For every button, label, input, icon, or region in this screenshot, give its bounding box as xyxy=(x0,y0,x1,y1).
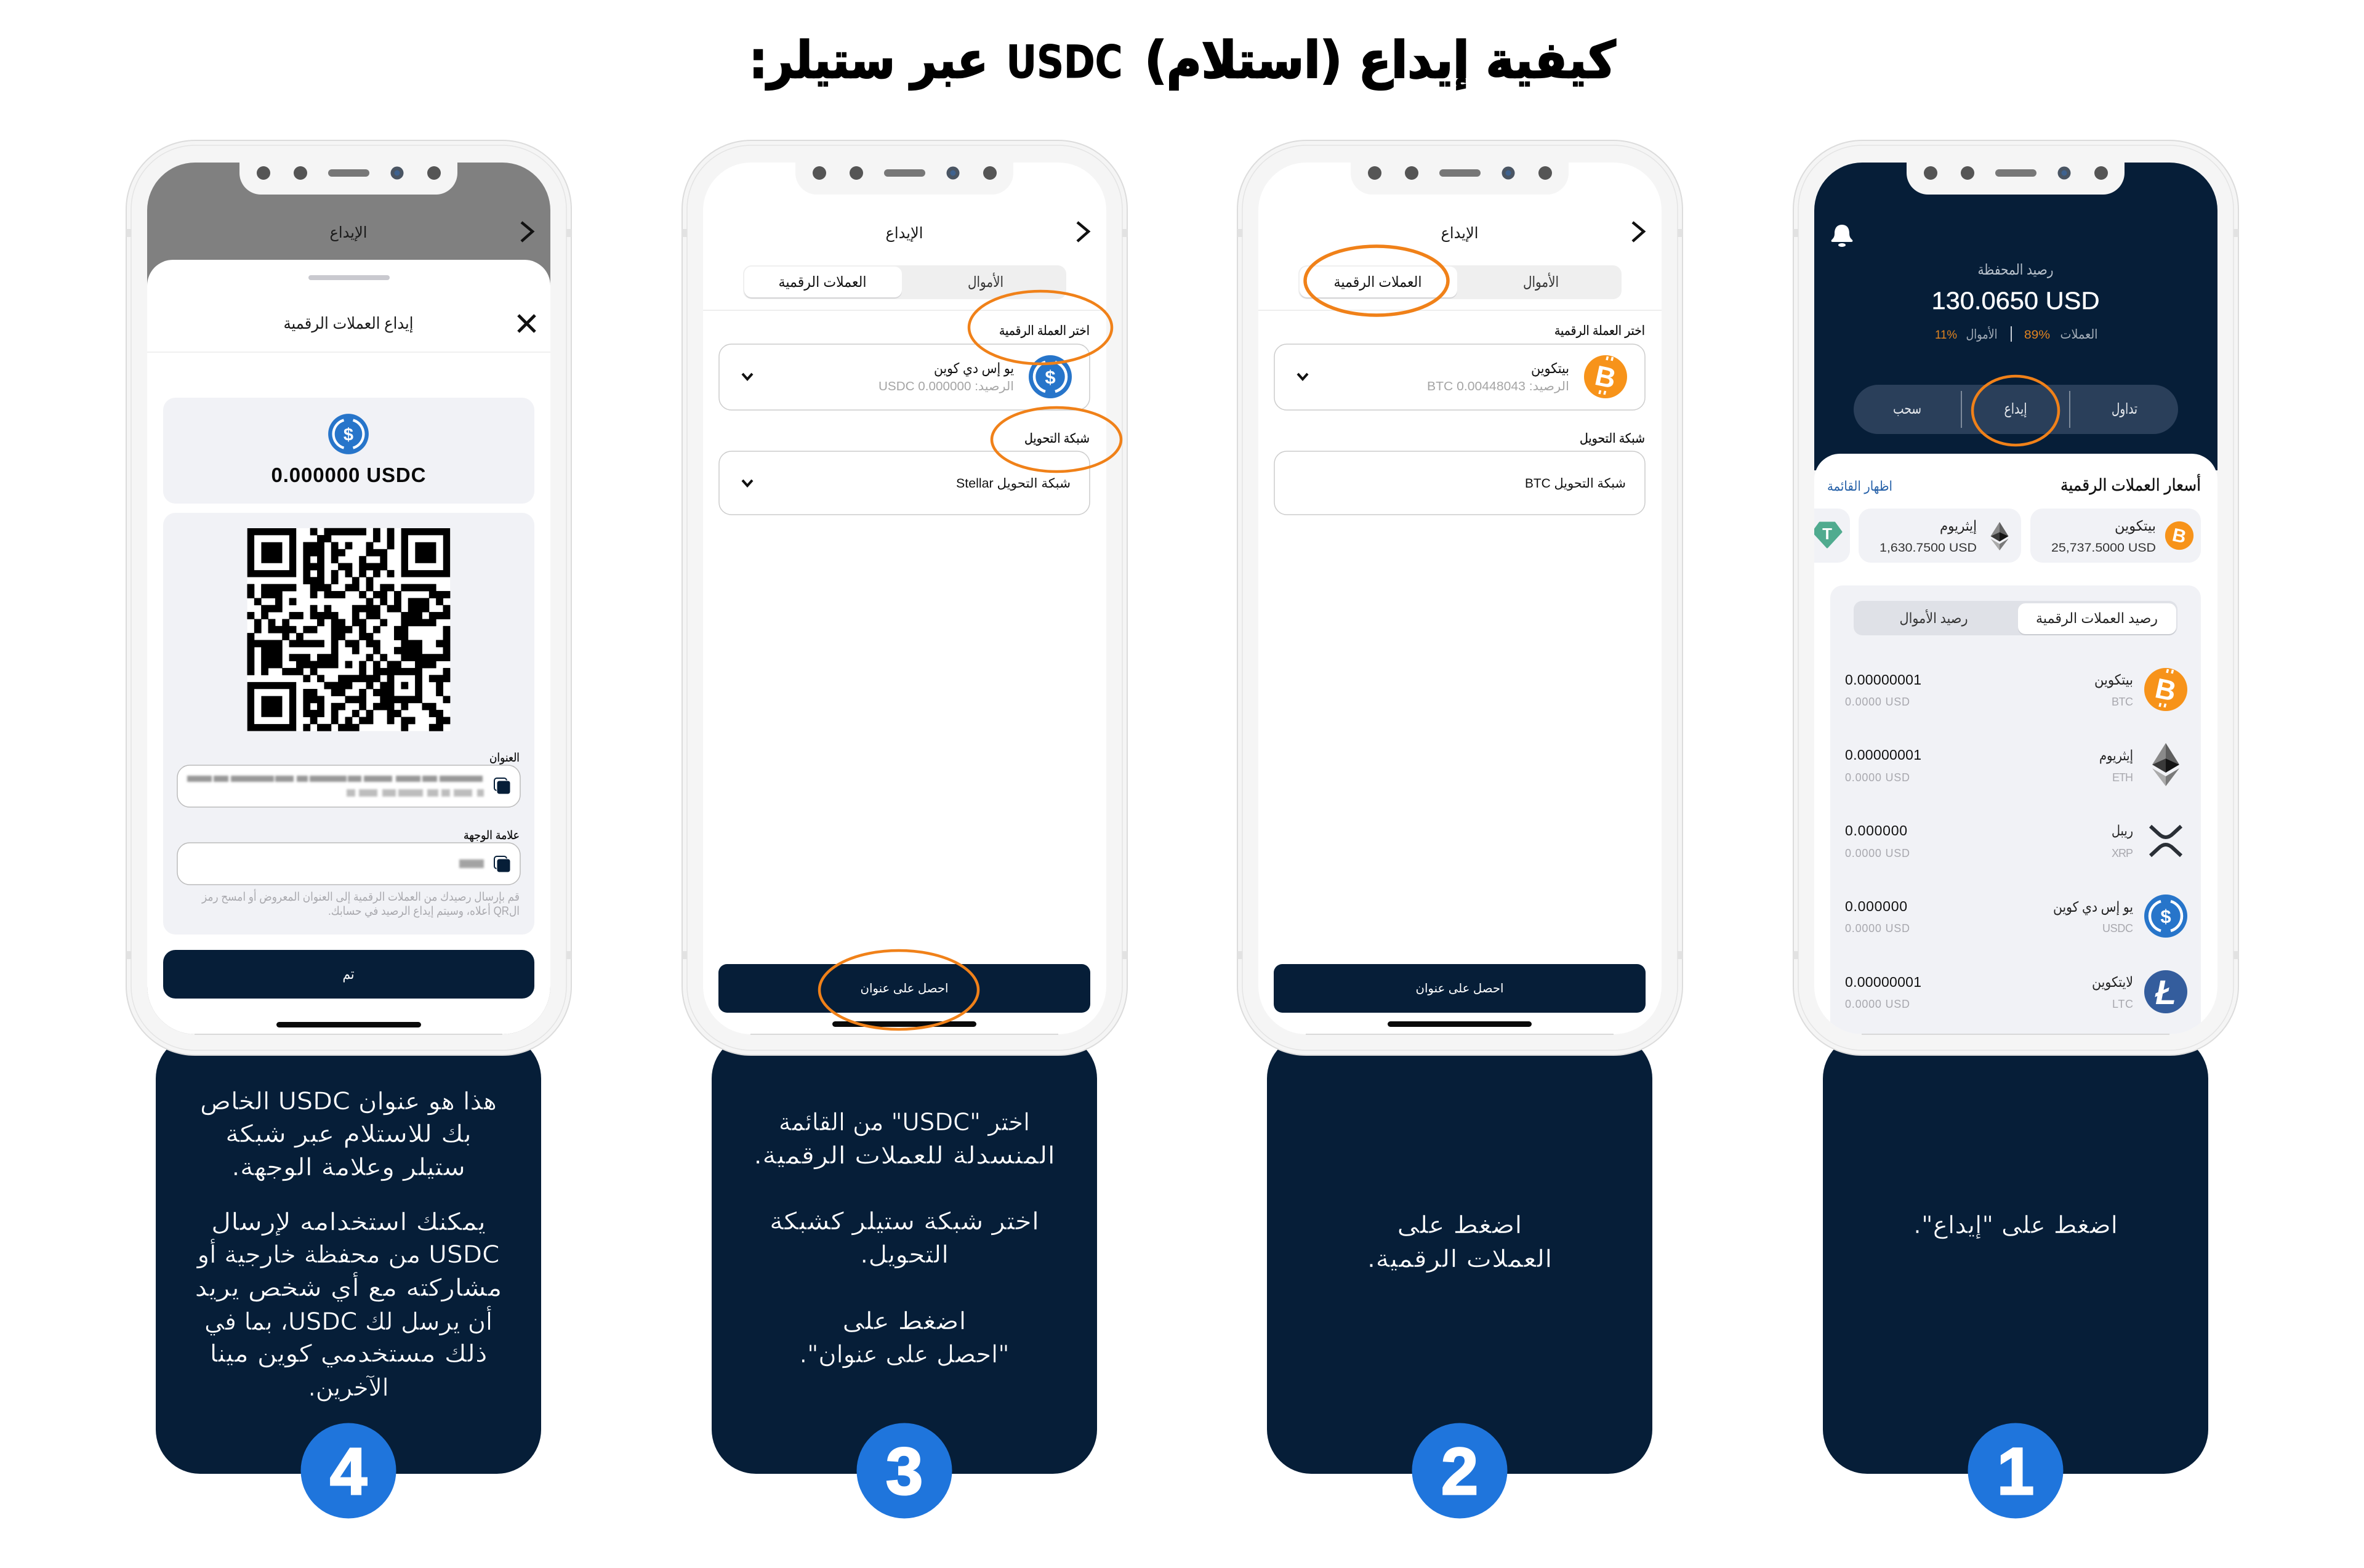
text: step 4 first paragraph xyxy=(200,1088,497,1181)
step number 4: 4 xyxy=(330,1434,367,1508)
highlight: get address button xyxy=(819,951,978,1029)
price card: Ethereum xyxy=(1859,509,2021,563)
title xyxy=(749,31,1616,90)
balance tabs: رصيد الأموال xyxy=(1900,609,1968,627)
QR code xyxy=(247,528,450,731)
text: press get address: "احصل على عنوان". xyxy=(799,1341,1010,1369)
field: currency xyxy=(1274,324,1645,410)
field: network xyxy=(1274,432,1645,515)
step 3 column xyxy=(682,140,1127,1518)
row: Litecoin: LTC xyxy=(2112,998,2133,1010)
row: USDC: 0.0000 USD xyxy=(1845,922,1910,935)
heading: crypto prices: أسعار العملات الرقمية xyxy=(2060,473,2201,495)
field: network xyxy=(719,432,1090,515)
action pill: إيداع xyxy=(2004,401,2027,418)
text: step 4 second paragraph: أن يرسل لك USDC، بما في xyxy=(204,1306,492,1336)
row: XRP: XRP xyxy=(2112,847,2133,859)
step 2 column xyxy=(1237,140,1683,1518)
destination tag field xyxy=(177,829,520,885)
button: get address xyxy=(718,964,1090,1013)
row: Ethereum: ETH xyxy=(2112,771,2133,784)
text: step 4 first paragraph: بك للاستلام عبر شبكة xyxy=(225,1120,472,1148)
panel: step 4 instructions xyxy=(156,1034,541,1474)
text: step 4 second paragraph: USDC من محفظة خارجية أو xyxy=(196,1239,500,1269)
text: press get address xyxy=(799,1308,1010,1369)
title: كيفية إيداع (استلام) xyxy=(1145,31,1616,90)
price card: Ethereum: إيثريوم xyxy=(1940,518,1977,534)
icon: copy address xyxy=(494,778,510,794)
icon: copy tag xyxy=(494,856,510,872)
icon: USDC xyxy=(328,414,369,454)
icon: close xyxy=(518,315,535,332)
row: Bitcoin: بيتكوين xyxy=(2094,672,2133,688)
tabs: الأموال xyxy=(968,273,1003,291)
text: press crypto tab xyxy=(1367,1212,1553,1273)
row: Bitcoin: 0.00000001 xyxy=(1845,672,1921,688)
highlight: deposit button xyxy=(1972,376,2059,445)
notch xyxy=(1907,163,2125,195)
row: Bitcoin: 0.0000 USD xyxy=(1845,696,1910,708)
icon: back chevron xyxy=(521,222,533,241)
icon: USDC xyxy=(1029,355,1072,398)
screen heading: الإيداع xyxy=(330,224,367,241)
text: press deposit: اضغط على "إيداع". xyxy=(1913,1212,2118,1239)
field: currency: الرصيد: BTC 0.00448043 xyxy=(1427,380,1569,393)
tabs: العملات الرقمية xyxy=(778,274,867,291)
panel: step 2 instructions xyxy=(1267,1034,1652,1474)
button: done xyxy=(163,950,534,999)
allocation row: 11% xyxy=(1935,329,1957,342)
step number 1: 1 xyxy=(1997,1434,2034,1508)
allocation row: 89% xyxy=(2024,329,2050,342)
title: USDC xyxy=(1006,36,1123,89)
field: network: شبكة التحويل Stellar xyxy=(956,476,1071,491)
row: XRP: 0.0000 USD xyxy=(1845,847,1910,859)
tabs: الأموال xyxy=(1523,273,1559,291)
tabs xyxy=(743,265,1066,299)
text: step 4 second paragraph xyxy=(195,1208,502,1402)
card: USDC balance xyxy=(163,398,534,504)
balance amount: 0.000000 USDC xyxy=(271,464,426,486)
step number 1 xyxy=(1968,1423,2064,1518)
link: show list: اظهار القائمة xyxy=(1827,478,1892,494)
balances panel xyxy=(1830,585,2201,1053)
balance tabs xyxy=(1854,601,2177,635)
wallet balance: 130.0650 USD xyxy=(1932,287,2099,315)
action pill xyxy=(1854,385,2178,434)
text: press crypto tab: اضغط على xyxy=(1397,1212,1522,1239)
text: choose USDC xyxy=(754,1109,1055,1170)
text: step 4 second paragraph: يمكنك استخدامه لإرسال xyxy=(211,1208,486,1236)
row: USDC: USDC xyxy=(2102,922,2133,935)
row: USDC: $ xyxy=(2160,906,2171,927)
step 1 column xyxy=(1793,140,2238,1518)
highlight: currency label xyxy=(969,291,1112,364)
step number 3 xyxy=(857,1423,952,1518)
price card: Bitcoin: B xyxy=(2171,525,2188,547)
field: currency: اختر العملة الرقمية xyxy=(999,324,1090,338)
price card: Tether: T xyxy=(1822,525,1832,543)
icon: USDC: $ xyxy=(1045,366,1056,388)
row: Litecoin xyxy=(1845,970,2187,1013)
icon: back chevron xyxy=(1077,222,1088,241)
notch xyxy=(239,163,457,195)
button: get address xyxy=(1274,964,1646,1013)
bottom sheet xyxy=(147,260,550,1060)
field: network: شبكة التحويل xyxy=(1580,432,1645,446)
action pill: سحب xyxy=(1893,401,1921,417)
row: Bitcoin: BTC xyxy=(2112,696,2133,708)
price card: Bitcoin: 25,737.5000 USD xyxy=(2051,542,2156,555)
notch xyxy=(1351,163,1569,195)
text: press crypto tab: العملات الرقمية. xyxy=(1367,1245,1553,1273)
text: press get address: اضغط على xyxy=(842,1308,967,1335)
icon: bell xyxy=(1831,225,1852,247)
tabs xyxy=(1298,265,1622,299)
screen: deposit QR xyxy=(147,163,550,1060)
row: Bitcoin xyxy=(1845,668,2187,711)
highlight: network label xyxy=(992,408,1121,472)
allocation row: العملات xyxy=(2060,328,2098,342)
field: currency: اختر العملة الرقمية xyxy=(1554,324,1645,338)
step number 3: 3 xyxy=(886,1434,923,1508)
row: Litecoin: 0.00000001 xyxy=(1845,974,1921,990)
step number 4 xyxy=(300,1423,396,1518)
title: عبر ستيلر: xyxy=(749,31,988,90)
destination tag field: علامة الوجهة xyxy=(464,829,520,842)
text: step 4 first paragraph: هذا هو عنوان USDC الخاص xyxy=(200,1088,497,1116)
text: choose USDC: المنسدلة للعملات الرقمية. xyxy=(754,1142,1055,1170)
wallet balance xyxy=(1932,262,2099,315)
field: network: شبكة التحويل xyxy=(1024,432,1090,446)
text: step 4 first paragraph: ستيلر وعلامة الوجهة. xyxy=(231,1154,465,1181)
button: get address: احصل على عنوان xyxy=(1416,982,1503,995)
price card: Tether xyxy=(1794,509,1850,563)
field: currency xyxy=(719,324,1090,410)
row: Litecoin: Ł xyxy=(2155,973,2176,1011)
step number 2 xyxy=(1412,1423,1507,1518)
address field: العنوان xyxy=(489,752,520,765)
screen heading: الإيداع xyxy=(885,225,923,242)
screen: select currency and network xyxy=(703,163,1106,1034)
phone 3 xyxy=(682,140,1127,1055)
phone 2 xyxy=(1237,140,1683,1055)
row: USDC: 0.000000 xyxy=(1845,898,1907,914)
icon: back chevron xyxy=(1633,222,1644,241)
text: choose USDC: اختر "USDC" من القائمة xyxy=(779,1109,1030,1136)
text: choose Stellar network: اختر شبكة ستيلر كشبكة xyxy=(770,1208,1039,1236)
row: USDC xyxy=(1845,895,2187,938)
row: Bitcoin: B xyxy=(2152,672,2179,707)
price card: Ethereum: 1,630.7500 USD xyxy=(1880,542,1977,555)
text: choose Stellar network xyxy=(770,1208,1039,1269)
row: Litecoin: 0.0000 USD xyxy=(1845,998,1910,1010)
row: USDC: يو إس دي كوين xyxy=(2053,899,2133,915)
field: currency: بيتكوين xyxy=(1531,360,1569,377)
row: XRP xyxy=(1845,822,2181,859)
address field xyxy=(177,752,520,807)
price card: Bitcoin xyxy=(2030,509,2201,563)
row: Ethereum: 0.00000001 xyxy=(1845,747,1921,763)
panel: step 1 instructions xyxy=(1823,1034,2208,1474)
notch xyxy=(795,163,1013,195)
screen heading: الإيداع xyxy=(1441,225,1479,242)
balance tabs: رصيد العملات الرقمية xyxy=(2036,610,2158,627)
tabs: العملات الرقمية xyxy=(1333,274,1422,291)
panel: step 3 instructions xyxy=(712,1034,1097,1474)
text: step 4 second paragraph: ذلك مستخدمي كوين مينا xyxy=(210,1340,487,1368)
price card: Bitcoin: بيتكوين xyxy=(2115,518,2156,534)
help text xyxy=(201,889,520,919)
field: currency: الرصيد: USDC 0.000000 xyxy=(878,380,1014,393)
help text: الQR أعلاه، وسيتم إيداع الرصيد في حسابك. xyxy=(328,903,520,919)
icon: USDC: $ xyxy=(344,425,353,444)
row: Ethereum: 0.0000 USD xyxy=(1845,771,1910,784)
row: Ethereum xyxy=(1845,743,2179,786)
highlight: crypto tab xyxy=(1305,246,1448,315)
icon: dropdown xyxy=(742,480,752,486)
allocation row xyxy=(1935,326,2098,342)
icon: Bitcoin: B xyxy=(1592,359,1619,395)
icon: dropdown xyxy=(1298,374,1308,379)
row: Ethereum: إيثريوم xyxy=(2099,747,2133,764)
text: choose Stellar network: التحويل. xyxy=(860,1241,949,1269)
sheet title: إيداع العملات الرقمية xyxy=(283,314,414,333)
text: step 4 second paragraph: مشاركته مع أي شخص يريد xyxy=(195,1272,502,1302)
field: network: شبكة التحويل BTC xyxy=(1525,476,1626,491)
row: XRP: ريبل xyxy=(2112,822,2133,839)
help text: قم بإرسال رصيدك من العملات الرقمية إلى العنوان المعروض أو امسح رمز xyxy=(201,889,520,904)
icon: Bitcoin xyxy=(1584,355,1627,398)
card: QR and address xyxy=(163,513,534,935)
screen: wallet home xyxy=(1794,163,2217,1069)
step 4 column xyxy=(126,140,571,1518)
phone 4 xyxy=(126,140,571,1060)
screen: deposit tabs xyxy=(1258,163,1662,1034)
row: Litecoin: لايتكوين xyxy=(2092,974,2133,991)
field: currency: يو إس دي كوين xyxy=(934,360,1014,377)
button: get address: احصل على عنوان xyxy=(861,982,948,995)
row: XRP: 0.000000 xyxy=(1845,822,1907,838)
wallet balance: رصيد المحفظة xyxy=(1977,262,2054,278)
icon: dropdown xyxy=(742,374,752,379)
allocation row: الأموال xyxy=(1966,326,1997,342)
phone 1 xyxy=(1793,140,2238,1069)
button: done: تم xyxy=(342,966,355,983)
white sheet xyxy=(1814,454,2217,1069)
text: step 4 second paragraph: الآخرين. xyxy=(308,1374,389,1402)
action pill: تداول xyxy=(2112,401,2137,417)
step number 2: 2 xyxy=(1441,1434,1478,1508)
